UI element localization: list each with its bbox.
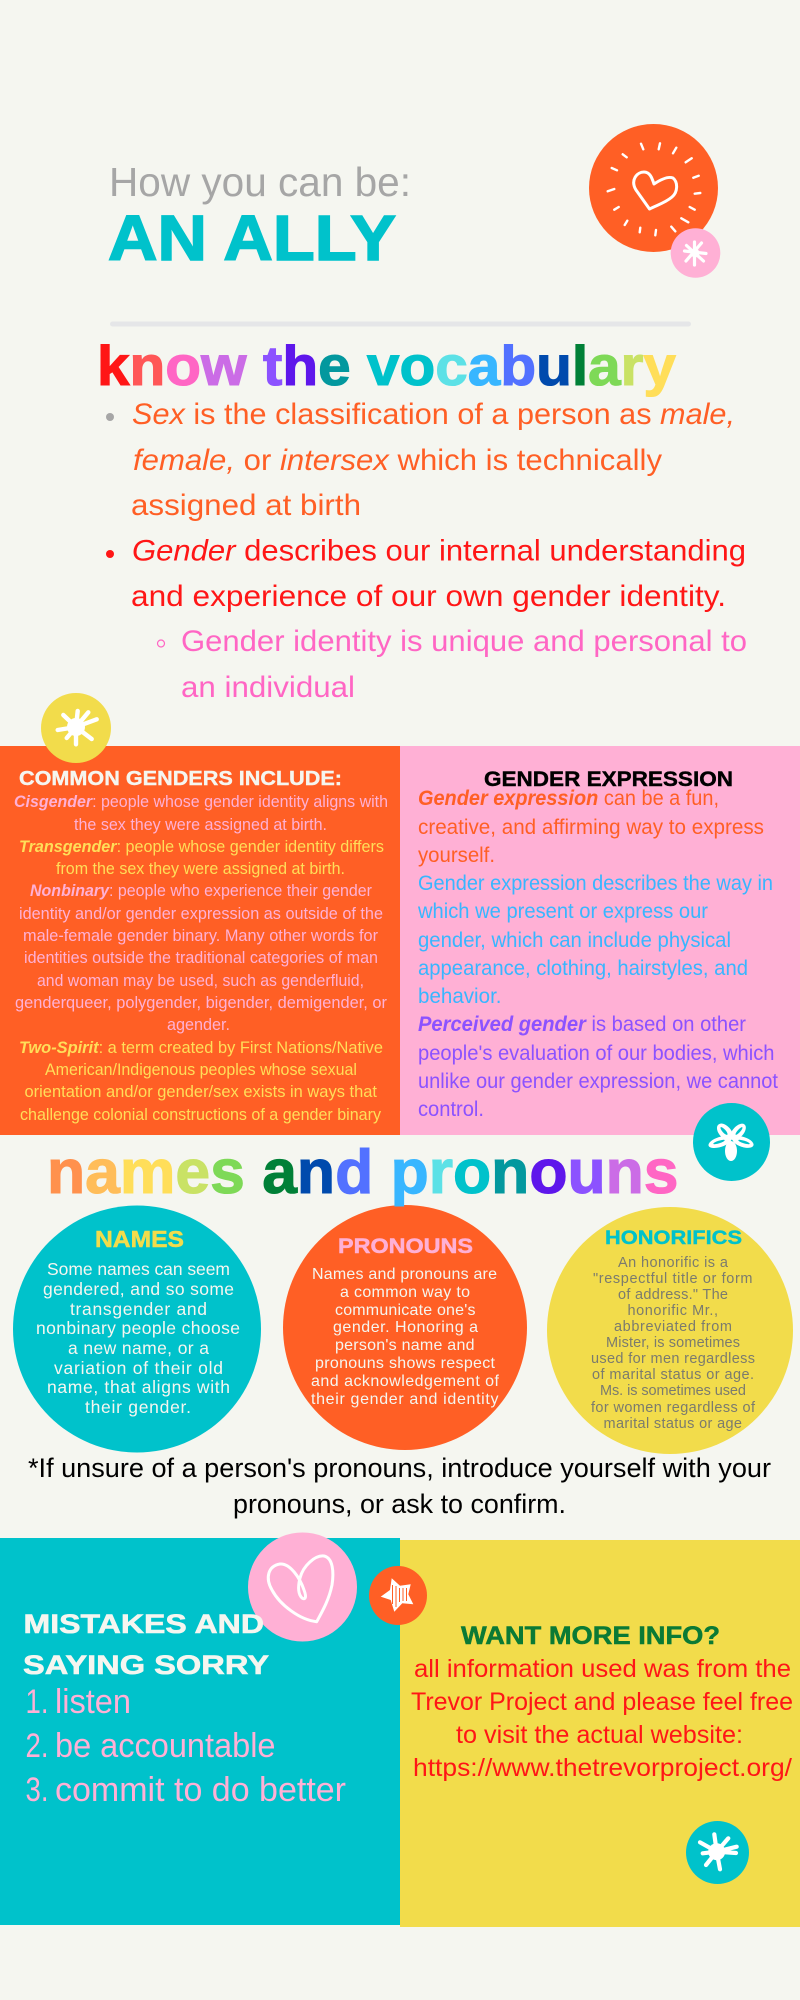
bullet: sex: female, or intersex which is technically: [133, 444, 662, 477]
icon: pink heart badge: [248, 1532, 357, 1642]
heading: gender expression: GENDER EXPRESSION: [484, 768, 733, 791]
sub-bullet: gender identity: an individual: [181, 671, 355, 704]
text: honorifics description: An honorific is a: [618, 1255, 729, 1271]
icon: orange star badge: [369, 1566, 427, 1625]
numbered list: steps: listen: [55, 1683, 131, 1721]
bullet: sex: [106, 398, 735, 522]
circle: honorifics: [547, 1207, 793, 1454]
bullet: sex: Sex is the classification of a person as male,: [132, 398, 735, 431]
heading: mistakes and saying sorry: MISTAKES AND: [24, 1609, 264, 1639]
panel: common genders: [0, 746, 400, 1135]
text: honorifics description: Ms. is sometimes used: [600, 1383, 746, 1399]
text: gender expression description: Perceived gender is based on other: [418, 1013, 746, 1036]
text: honorifics description: honorific Mr.,: [628, 1303, 718, 1319]
bullet: gender: [106, 534, 746, 613]
text: honorifics description: marital status or age: [604, 1416, 742, 1432]
text: pronouns description: pronouns shows respect: [315, 1355, 496, 1372]
note: if unsure of pronouns: [28, 1453, 771, 1519]
numbered list: steps: 3.: [26, 1771, 48, 1809]
text: names description: [36, 1259, 240, 1417]
icon: teal flower badge: [693, 1103, 770, 1181]
text: gender definitions: genderqueer, polygender, bigender, demigender, or: [15, 993, 387, 1012]
text: gender expression description: yourself.: [418, 844, 495, 867]
panel: want more info: [400, 1540, 800, 1927]
text: gender expression description: behavior.: [418, 985, 502, 1008]
divider rule: [110, 322, 691, 326]
heading: want more info: WANT MORE INFO?: [461, 1622, 720, 1650]
heading: names: NAMES: [95, 1226, 184, 1252]
heading: names and pronouns: names and pronouns: [47, 1138, 678, 1207]
text: gender expression description: unlike our gender expression, we cannot: [418, 1070, 778, 1093]
bullet: sex: assigned at birth: [131, 489, 361, 522]
numbered list: steps: 2.: [26, 1727, 48, 1765]
text: names description: transgender and: [70, 1299, 207, 1319]
icon: teal asterisk badge: [686, 1821, 749, 1884]
text: source information: all information used was from the: [414, 1655, 791, 1683]
circle: pronouns: [283, 1205, 527, 1450]
text: pronouns description: [311, 1266, 500, 1408]
bullet: gender: and experience of our own gender identity.: [131, 580, 726, 613]
panel: mistakes and saying sorry: [0, 1532, 400, 1925]
text: gender definitions: male-female gender binary. Many other words for: [23, 926, 378, 945]
text: honorifics description: of marital status or age.: [592, 1367, 754, 1383]
text: gender expression description: control.: [418, 1098, 484, 1121]
text: gender definitions: Transgender: people whose gender identity differs: [19, 837, 384, 856]
title: How you can be:: [109, 159, 411, 205]
text: gender definitions: identities outside the traditional categories of man: [24, 948, 378, 967]
heading: know the vocabulary: know the vocabulary: [97, 334, 676, 397]
text: gender expression description: people's evaluation of our bodies, which: [418, 1042, 774, 1065]
text: pronouns description: person's name and: [335, 1337, 474, 1354]
numbered list: steps: 1.: [26, 1683, 48, 1721]
bullet: gender: Gender describes our internal understanding: [132, 534, 746, 568]
numbered list: steps: commit to do better: [55, 1771, 346, 1809]
sub-bullet: gender identity: [158, 625, 747, 704]
text: gender definitions: [14, 792, 388, 1124]
note: if unsure of pronouns: *If unsure of a person's pronouns, introduce yourself with your: [28, 1453, 771, 1483]
text: gender definitions: American/Indigenous peoples whose sexual: [45, 1060, 357, 1079]
note: if unsure of pronouns: pronouns, or ask to confirm.: [233, 1489, 566, 1519]
text: gender definitions: Cisgender: people whose gender identity aligns with: [14, 792, 388, 811]
icon: yellow asterisk badge: [41, 693, 111, 763]
heading: honorifics: HONORIFICS: [605, 1228, 742, 1249]
text: pronouns description: and acknowledgement of: [311, 1373, 500, 1390]
text: gender definitions: from the sex they were assigned at birth.: [56, 859, 345, 878]
text: gender expression description: Gender expression describes the way in: [418, 872, 773, 895]
text: names description: their gender.: [85, 1397, 191, 1417]
text: gender definitions: and woman may be used, such as genderfluid,: [37, 971, 364, 990]
numbered list: steps: [26, 1683, 346, 1809]
text: gender expression description: gender, which can include physical: [418, 929, 731, 952]
heading: common genders include: COMMON GENDERS INCLUDE:: [19, 768, 342, 790]
text: honorifics description: "respectful title or form: [593, 1271, 752, 1287]
text: names description: a new name, or a: [68, 1338, 209, 1358]
text: source information: [411, 1655, 793, 1782]
text: names description: Some names can seem: [47, 1259, 230, 1279]
text: honorifics description: Mister, is sometimes: [606, 1335, 740, 1351]
text: names description: gendered, and so some: [43, 1279, 234, 1299]
sub-bullet: gender identity: Gender identity is unique and personal to: [181, 625, 747, 658]
text: gender definitions: agender.: [167, 1015, 230, 1034]
text: gender definitions: identity and/or gender expression as outside of the: [19, 904, 383, 923]
text: pronouns description: gender. Honoring a: [333, 1319, 478, 1336]
text: gender definitions: orientation and/or gender/sex exists in ways that: [24, 1082, 377, 1101]
heading: mistakes and saying sorry: SAYING SORRY: [23, 1650, 269, 1680]
text: honorifics description: used for men regardless: [591, 1351, 755, 1367]
text: gender expression description: appearance, clothing, hairstyles, and: [418, 957, 748, 980]
circle: names: [13, 1206, 261, 1452]
panel: gender expression: [400, 746, 800, 1135]
text: names description: variation of their old: [54, 1358, 223, 1378]
heading: pronouns: PRONOUNS: [338, 1235, 473, 1258]
text: names description: name, that aligns with: [47, 1377, 230, 1397]
text: pronouns description: a common way to: [340, 1284, 470, 1301]
text: gender definitions: challenge colonial constructions of a gender binary: [20, 1105, 381, 1124]
text: gender definitions: Two-Spirit: a term created by First Nations/Native: [19, 1038, 383, 1057]
text: gender definitions: Nonbinary: people who experience their gender: [30, 881, 372, 900]
numbered list: steps: be accountable: [55, 1727, 276, 1765]
text: honorifics description: [591, 1255, 756, 1432]
text: pronouns description: Names and pronouns are: [312, 1266, 497, 1283]
text: names description: nonbinary people choose: [36, 1318, 240, 1338]
text: honorifics description: for women regardless of: [591, 1400, 756, 1416]
text: honorifics description: of address." The: [618, 1287, 728, 1303]
text: pronouns description: communicate one's: [335, 1302, 476, 1319]
icon: pink asterisk badge: [671, 228, 720, 278]
text: source information: to visit the actual website:: [456, 1721, 743, 1749]
text: honorifics description: abbreviated from: [614, 1319, 732, 1335]
title: AN ALLY: [108, 202, 396, 274]
icon: heart with rays in orange circle: [589, 124, 718, 252]
text: gender expression description: creative, and affirming way to express: [418, 816, 764, 839]
text: gender expression description: Gender expression can be a fun,: [418, 787, 719, 810]
text: gender definitions: the sex they were assigned at birth.: [74, 815, 327, 834]
title: [108, 159, 411, 274]
bullet list: sex and gender definitions: [106, 398, 747, 704]
text: gender expression description: [417, 787, 778, 1121]
text: gender expression description: which we present or express our: [417, 900, 708, 923]
text: source information: https://www.thetrevorproject.org/: [413, 1754, 792, 1782]
text: pronouns description: their gender and identity: [311, 1391, 498, 1408]
text: source information: Trevor Project and please feel free: [411, 1688, 793, 1716]
heading: mistakes and saying sorry: [23, 1609, 269, 1680]
